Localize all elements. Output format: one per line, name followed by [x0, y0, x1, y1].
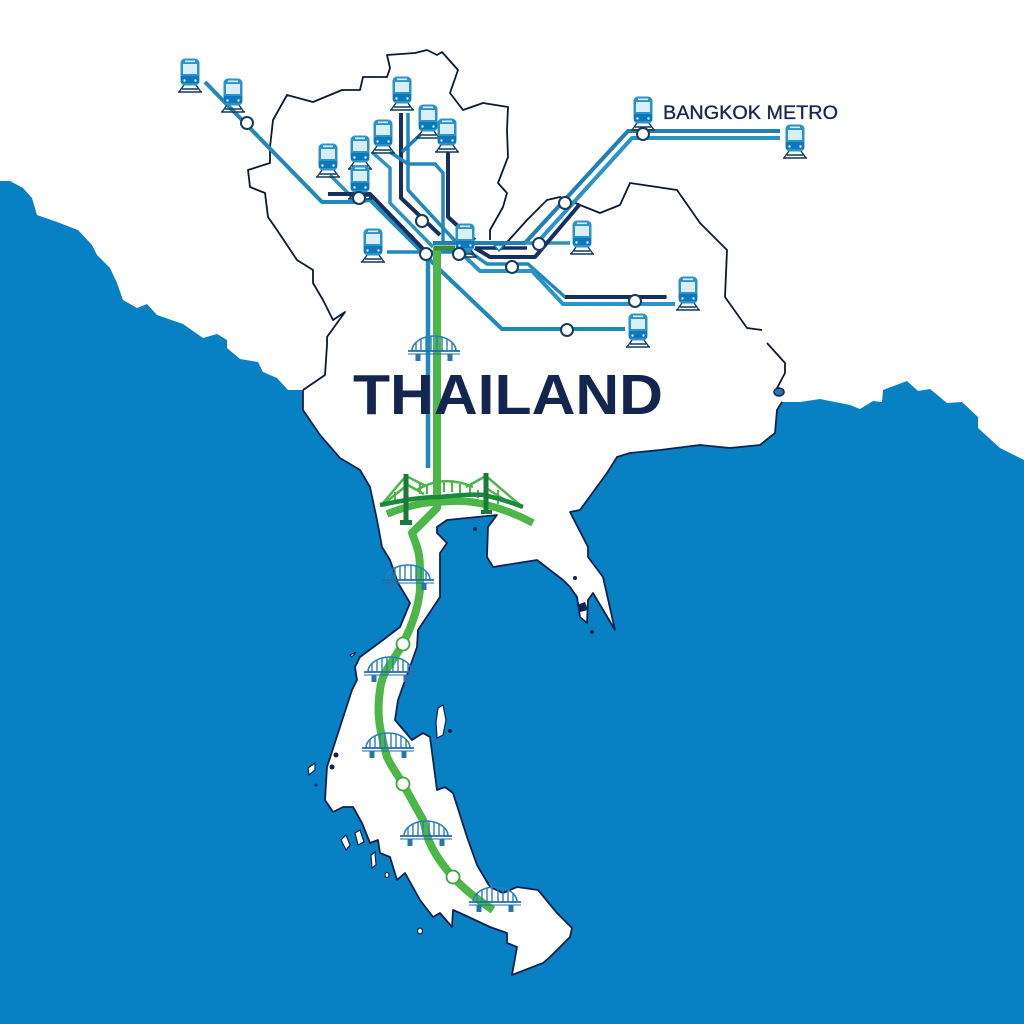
- line: metro inner: [535, 138, 780, 245]
- line: navy upper hub: [475, 246, 527, 250]
- bridge icon: [469, 887, 521, 912]
- line: northwest branch: [330, 175, 355, 200]
- line: west stub: [387, 250, 470, 254]
- line: east stub: [525, 241, 570, 245]
- hub triangle marker: [494, 245, 504, 251]
- line: north navy: [401, 113, 440, 235]
- border estuary mark: [774, 388, 784, 396]
- line: north blue: [408, 113, 457, 243]
- islands: [308, 652, 446, 934]
- bridge icon: [362, 733, 414, 758]
- small dark islets: [314, 527, 594, 786]
- train icons: [178, 59, 807, 347]
- bridge deck: [380, 495, 523, 507]
- line: east blue: [460, 252, 675, 304]
- bridge tower east: [484, 473, 488, 512]
- line: long northwest to southeast: [205, 82, 625, 329]
- metro label: BANGKOK METRO: [663, 103, 838, 124]
- line: diagonal spur: [402, 135, 420, 152]
- line: south vertical: [426, 258, 430, 468]
- big green bridge: [380, 473, 533, 525]
- line: east navy: [467, 250, 667, 297]
- bridge hangers: [395, 481, 498, 504]
- stations: [241, 117, 649, 336]
- bridge cables: [383, 476, 520, 505]
- coastline outline: [303, 390, 782, 975]
- small bridge icon: [408, 336, 460, 361]
- bridge icon: [382, 565, 434, 590]
- green main line: [378, 247, 493, 910]
- bridge tower west: [404, 474, 408, 522]
- green line stations: [396, 638, 460, 884]
- green junction: [434, 246, 455, 250]
- title: THAILAND: [353, 363, 663, 427]
- line: metro outer: [433, 131, 780, 243]
- bridge road: [387, 501, 533, 523]
- bridge icon: [400, 821, 452, 846]
- northern border outline: [248, 50, 785, 392]
- bridge icon: [364, 657, 416, 682]
- line: north loop: [390, 152, 443, 243]
- line: north light: [373, 153, 433, 247]
- line: navy west: [328, 194, 427, 253]
- line: navy northeast: [475, 204, 580, 257]
- line: northeast navy: [448, 152, 475, 240]
- transit lines: [205, 82, 780, 468]
